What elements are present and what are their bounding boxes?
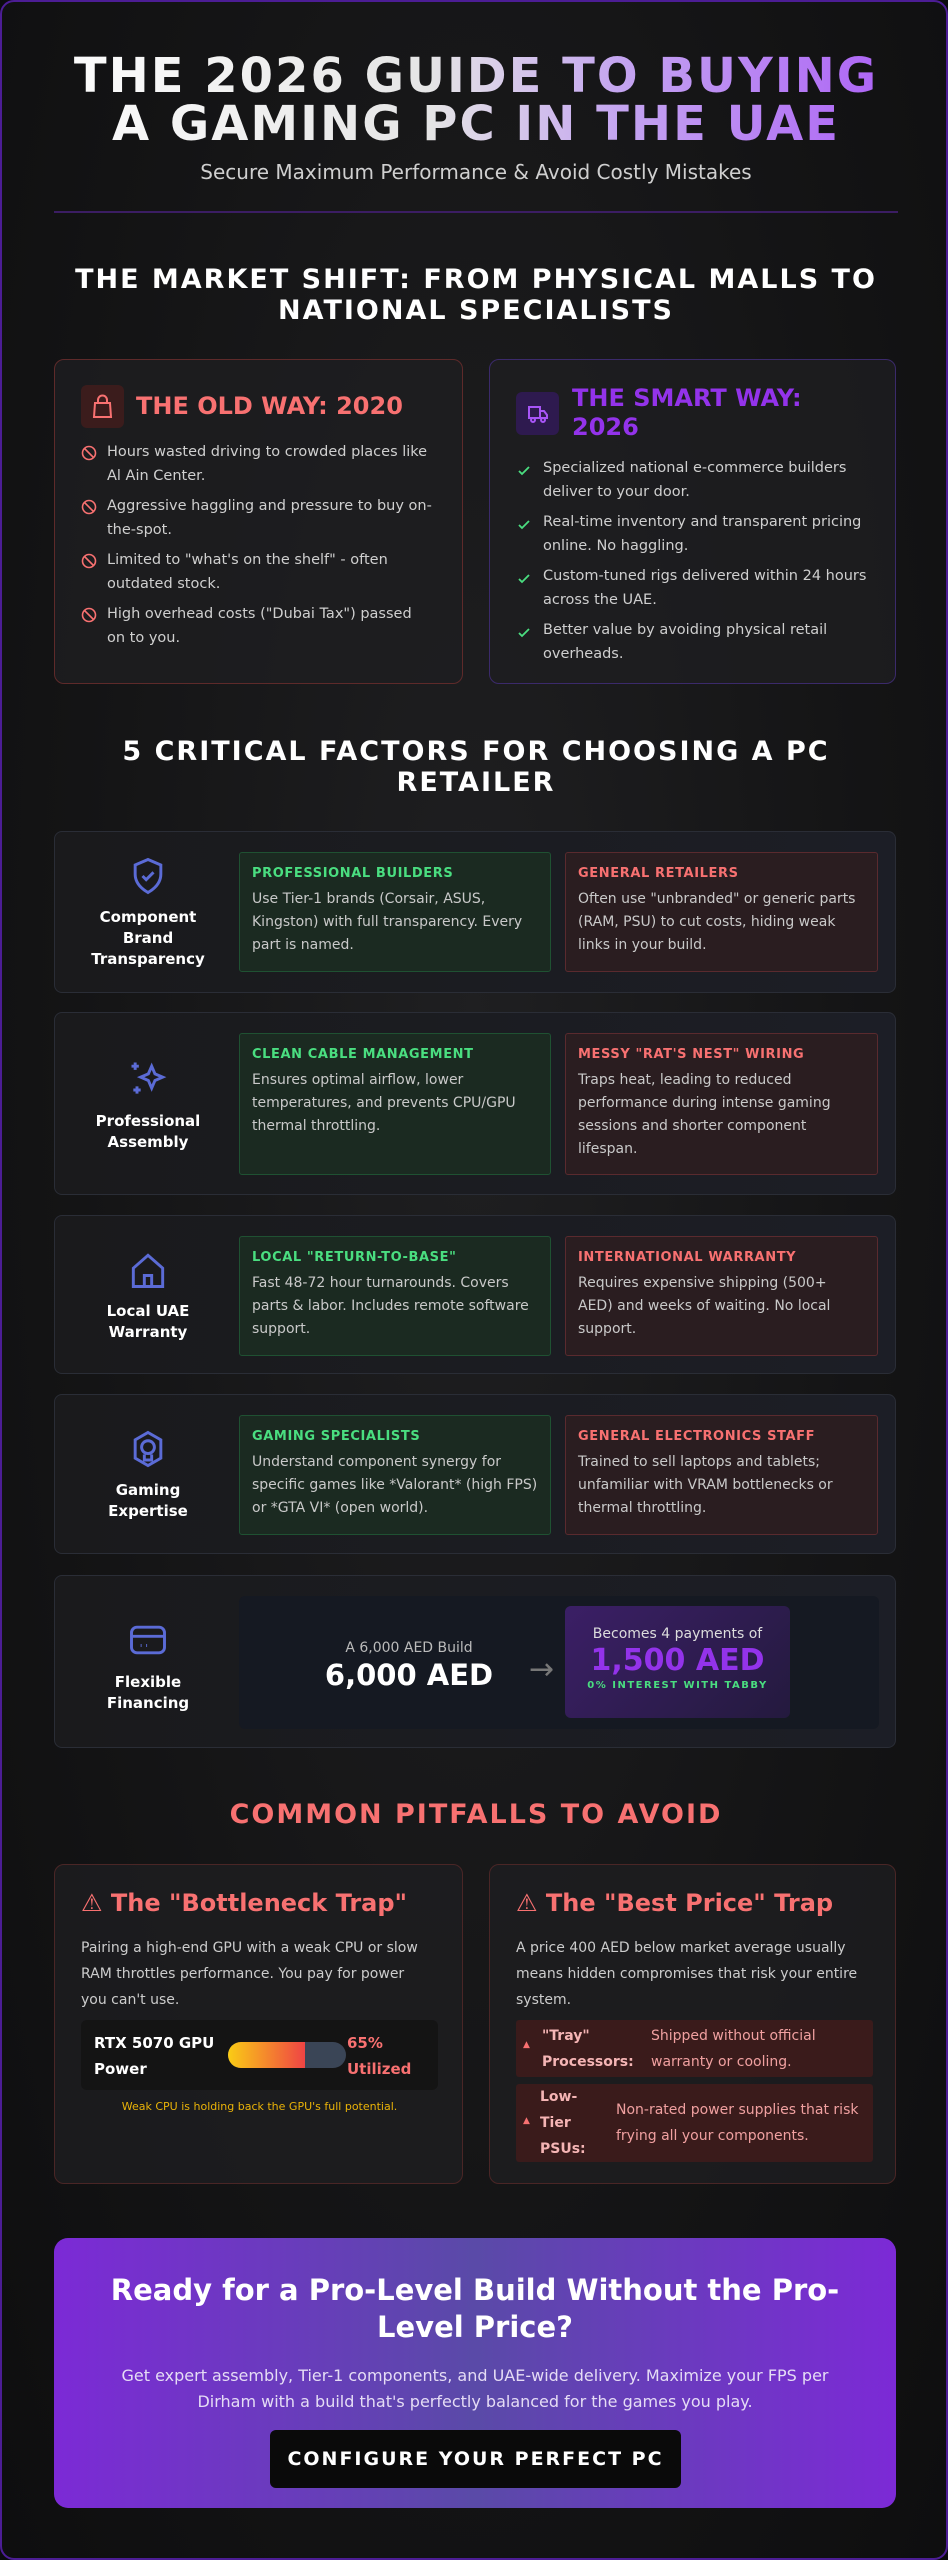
cta text: Get expert assembly, Tier-1 components, and UAE-wide delivery. Maximize your FPS per Dirham with a build that's perfectly balanced for the games you play. <box>121 2366 828 2411</box>
row: gaming expertise <box>54 1394 896 1554</box>
heading: old way: THE OLD WAY: 2020 <box>136 392 403 420</box>
heading: smart way: 2026 <box>572 413 639 441</box>
financing comparison <box>239 1596 879 1729</box>
row: local UAE warranty: Warranty <box>109 1323 187 1341</box>
row: gaming expertise: Trained to sell laptops and tablets; unfamiliar with VRAM bottlenecks or thermal throttling. <box>578 1454 833 1516</box>
caption: Weak CPU is holding back the GPU's full potential. <box>122 2100 397 2113</box>
row: component brand transparency: GENERAL RETAILERS <box>578 866 739 881</box>
installment box: Becomes 4 payments of <box>593 1626 762 1642</box>
row: gaming expertise: GENERAL ELECTRONICS STAFF <box>578 1429 815 1444</box>
title <box>2 52 948 148</box>
row: flexible financing: Financing <box>107 1694 189 1712</box>
list: smart way items: Specialized national e-commerce builders deliver to your door. <box>543 460 846 500</box>
row: professional assembly: Ensures optimal airflow, lower temperatures, and prevents CPU/GPU thermal throttling. <box>252 1072 516 1134</box>
chart: gpu utilization <box>81 2020 438 2090</box>
item: tray processors <box>516 2020 873 2077</box>
heading: smart way <box>572 384 802 441</box>
item: low-tier psus: Low- <box>540 2089 577 2105</box>
chart: gpu utilization: RTX 5070 GPU <box>94 2034 214 2052</box>
button: CONFIGURE YOUR PERFECT PC <box>287 2448 664 2470</box>
panel: old way <box>54 359 463 684</box>
row: gaming expertise: Expertise <box>108 1502 188 1520</box>
list: smart way items: Better value by avoiding physical retail overheads. <box>543 622 827 662</box>
row: professional assembly: CLEAN CABLE MANAGEMENT <box>252 1047 474 1062</box>
icon: truck <box>516 392 559 435</box>
list: old way items: Limited to "what's on the shelf" - often outdated stock. <box>107 552 388 592</box>
panel: smart way <box>489 359 896 684</box>
icon: shopping bag <box>81 385 124 428</box>
panel: bottleneck trap <box>54 1864 463 2184</box>
heading: market shift: THE MARKET SHIFT: FROM PHYSICAL MALLS TO NATIONAL SPECIALISTS <box>75 264 877 326</box>
heading: 5 factors: 5 CRITICAL FACTORS FOR CHOOSING A PC RETAILER <box>122 736 830 798</box>
heading: best price: ⚠ The "Best Price" Trap <box>516 1889 833 1917</box>
item: low-tier psus: Tier <box>540 2115 571 2131</box>
item: low-tier psus: ▲ <box>523 2116 530 2126</box>
cta heading: Ready for a Pro-Level Build Without the Pro-Level Price? <box>111 2273 839 2344</box>
installment box: 1,500 AED <box>591 1643 764 1678</box>
item: low-tier psus: PSUs: <box>540 2141 586 2157</box>
button <box>270 2430 681 2488</box>
row: component brand transparency <box>54 831 896 993</box>
title: THE 2026 GUIDE TO BUYING <box>74 48 878 104</box>
text: Pairing a high-end GPU with a weak CPU or slow RAM throttles performance. You pay for power you can't use. <box>81 1940 418 2008</box>
list: old way items <box>82 444 432 646</box>
row: component brand transparency: Often use "unbranded" or generic parts (RAM, PSU) to cut costs, hiding weak links in your build. <box>578 891 855 953</box>
heading: pitfalls: COMMON PITFALLS TO AVOID <box>230 1799 722 1830</box>
title: A GAMING PC IN THE UAE <box>112 96 840 152</box>
chart: gpu utilization: Utilized <box>347 2060 411 2078</box>
item: low-tier psus <box>516 2084 873 2162</box>
list: smart way items: Real-time inventory and transparent pricing online. No haggling. <box>543 514 861 554</box>
item: tray processors: Shipped without official warranty or cooling. <box>651 2028 816 2070</box>
row: professional assembly: Professional <box>96 1112 200 1130</box>
panel: best price trap <box>489 1864 896 2184</box>
row: component brand transparency: Component <box>100 908 196 926</box>
installment box: 0% INTEREST WITH TABBY <box>587 1680 768 1691</box>
text: A price 400 AED below market average usually means hidden compromises that risk your entire system. <box>516 1940 857 2008</box>
row: local UAE warranty <box>54 1215 896 1374</box>
row: component brand transparency: Transparency <box>91 950 205 968</box>
row: flexible financing: Flexible <box>115 1673 181 1691</box>
chart: gpu utilization: 65% <box>347 2034 383 2052</box>
row: component brand transparency: PROFESSIONAL BUILDERS <box>252 866 453 881</box>
row: local UAE warranty: Local UAE <box>107 1302 189 1320</box>
row: professional assembly <box>54 1012 896 1195</box>
CTA banner <box>54 2238 896 2508</box>
list: smart way items <box>518 460 866 662</box>
subtitle: Secure Maximum Performance & Avoid Costly Mistakes <box>200 160 752 184</box>
heading: smart way: THE SMART WAY: <box>572 384 802 412</box>
chart: gpu utilization: Power <box>94 2060 147 2078</box>
heading: bottleneck: ⚠ The "Bottleneck Trap" <box>81 1889 407 1917</box>
row: gaming expertise: GAMING SPECIALISTS <box>252 1429 420 1444</box>
row: component brand transparency: Brand <box>123 929 173 947</box>
row: professional assembly: Assembly <box>108 1133 188 1151</box>
row: component brand transparency: Use Tier-1 brands (Corsair, ASUS, Kingston) with full transparency. Every part is named. <box>252 891 522 953</box>
row: local UAE warranty: Requires expensive shipping (500+ AED) and weeks of waiting. No local support. <box>578 1275 830 1337</box>
row: professional assembly: Traps heat, leading to reduced performance during intense gaming sessions and shorter component lifespan. <box>578 1072 831 1157</box>
row: professional assembly: MESSY "RAT'S NEST" WIRING <box>578 1047 804 1062</box>
item: tray processors: "Tray" <box>542 2028 590 2044</box>
arrow: → <box>529 1652 554 1687</box>
list: old way items: High overhead costs ("Dubai Tax") passed on to you. <box>107 606 412 646</box>
row: flexible financing <box>54 1575 896 1748</box>
list: old way items: Hours wasted driving to crowded places like Al Ain Center. <box>107 444 427 484</box>
financing comparison: 6,000 AED <box>325 1658 493 1692</box>
item: tray processors: ▲ <box>523 2040 530 2050</box>
list: smart way items: Custom-tuned rigs delivered within 24 hours across the UAE. <box>543 568 866 608</box>
row: gaming expertise: Understand component synergy for specific games like *Valorant* (high FPS) or *GTA VI* (open world). <box>252 1454 537 1516</box>
row: local UAE warranty: Fast 48-72 hour turnarounds. Covers parts & labor. Includes remote software support. <box>252 1275 529 1337</box>
row: gaming expertise: Gaming <box>116 1481 180 1499</box>
item: tray processors: Processors: <box>542 2054 634 2070</box>
installment box <box>565 1606 790 1718</box>
financing comparison: A 6,000 AED Build <box>345 1640 473 1656</box>
row: local UAE warranty: LOCAL "RETURN-TO-BASE" <box>252 1250 456 1265</box>
row: local UAE warranty: INTERNATIONAL WARRANTY <box>578 1250 796 1265</box>
list: old way items: Aggressive haggling and pressure to buy on-the-spot. <box>107 498 432 538</box>
item: low-tier psus: Non-rated power supplies that risk frying all your components. <box>616 2102 858 2144</box>
